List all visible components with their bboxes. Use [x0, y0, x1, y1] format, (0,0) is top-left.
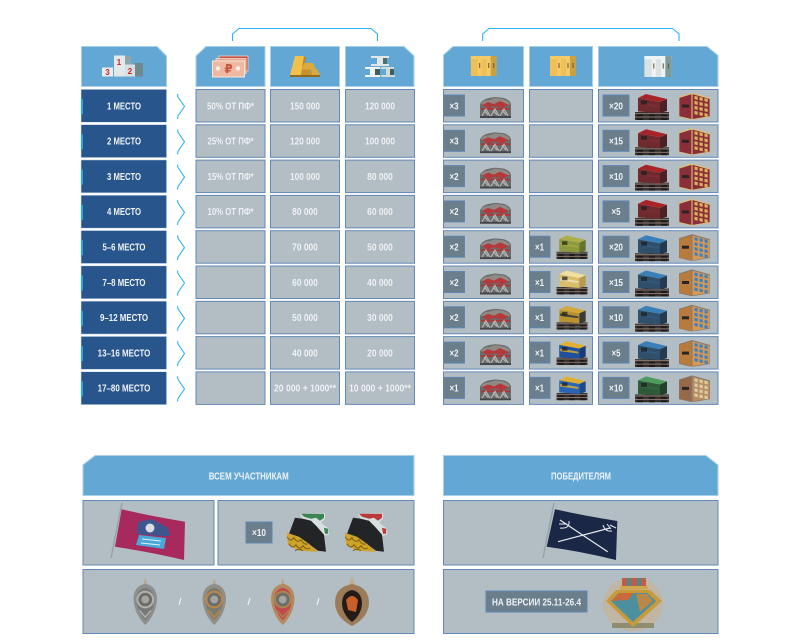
row: 7–8 место: ×2: [450, 278, 459, 289]
row: 2 место: 25% ОТ ПФ*: [208, 137, 254, 148]
row: 17–80 место: 17–80 МЕСТО: [98, 384, 151, 395]
row: 7–8 место: 7–8 МЕСТО: [102, 278, 146, 289]
row: 4 место: ×2: [450, 207, 459, 218]
row: 13–16 место: ×5: [612, 348, 621, 359]
row: 9–12 место: ×2: [450, 313, 459, 324]
row: 5–6 место: 50 000: [367, 242, 393, 253]
row: 3 место: 15% ОТ ПФ*: [208, 172, 254, 183]
row: 1 место: 1 МЕСТО: [107, 101, 141, 112]
row: 7–8 место: [81, 266, 718, 299]
row: 2 место: 2 МЕСТО: [107, 137, 141, 148]
row: 9–12 место: 9–12 МЕСТО: [100, 313, 148, 324]
row: 2 место: [81, 125, 718, 158]
row: 7–8 место: ×15: [609, 278, 623, 289]
icon: gold bars: [290, 56, 320, 77]
row: 4 место: 60 000: [367, 207, 393, 218]
header: gold: [270, 46, 340, 86]
icon: red camouflage: [345, 513, 387, 552]
row: 17–80 место: 20 000 + 1000**: [274, 384, 336, 395]
icon: medal degree 2: [202, 578, 226, 625]
row: 17–80 место: 10 000 + 1000**: [349, 384, 411, 395]
header: steel chest: [598, 46, 718, 86]
icon: version medal: [603, 577, 663, 631]
icon: podium: [102, 56, 143, 77]
icon: crimson flag: [115, 509, 185, 560]
row: 4 место: 10% ОТ ПФ*: [208, 207, 254, 218]
header: second gold chest: [530, 46, 592, 86]
row: 1 место: ×20: [609, 101, 623, 112]
bracket: right group: [483, 28, 679, 41]
icon: medal degree 3: [134, 578, 157, 625]
row: 2 место: ×15: [609, 137, 623, 148]
header: place: [82, 46, 166, 86]
row: 4 место: 4 МЕСТО: [107, 207, 141, 218]
row: 9–12 место: [81, 301, 718, 334]
row: 4 место: ×5: [612, 207, 621, 218]
row: 3 место: 3 МЕСТО: [107, 172, 141, 183]
icon: steel chest: [644, 56, 672, 77]
heading: всем участникам: ВСЕМ УЧАСТНИКАМ: [209, 472, 289, 482]
icon: podium: 2: [128, 67, 133, 76]
row: 2 место: 100 000: [365, 137, 395, 148]
row: 3 место: 80 000: [367, 172, 393, 183]
icon: medal degree 1: [271, 578, 294, 625]
row: 1 место: 150 000: [290, 101, 320, 112]
row: 9–12 место: ×1: [535, 313, 544, 324]
row: 2 место: 120 000: [290, 137, 320, 148]
row: 5–6 место: 5–6 МЕСТО: [102, 242, 146, 253]
row: 1 место: 120 000: [365, 101, 395, 112]
row: 17–80 место: ×1: [535, 384, 544, 395]
row: 13–16 место: ×2: [450, 348, 459, 359]
icon: steel beams: [365, 56, 395, 77]
row: 17–80 место: [81, 372, 718, 405]
row: 9–12 место: 30 000: [367, 313, 393, 324]
row: 5–6 место: ×1: [535, 242, 544, 253]
row: 17–80 место: ×10: [609, 384, 623, 395]
icon: navy flag: [547, 509, 617, 560]
icon: banknotes: ₽: [224, 62, 233, 76]
icon: green camouflage: [287, 513, 329, 552]
icon: gold chest: [550, 56, 576, 76]
navy flag panel: [444, 500, 718, 565]
row: 2 место: ×3: [450, 137, 459, 148]
camouflage panel: [218, 500, 414, 565]
row: 4 место: 80 000: [292, 207, 318, 218]
icon: gold chest: [471, 56, 497, 76]
row: 1 место: [81, 89, 718, 122]
row: 5–6 место: [81, 230, 718, 264]
flag panel: [83, 500, 214, 565]
bracket: left group: [232, 28, 378, 41]
row: 9–12 место: ×10: [609, 313, 623, 324]
icon: ace medal: [335, 577, 369, 626]
header: gold chest: [444, 46, 524, 86]
icon: podium: 1: [117, 58, 122, 67]
heading: победителям: ПОБЕДИТЕЛЯМ: [551, 472, 611, 482]
row: 7–8 место: 60 000: [292, 278, 318, 289]
panel: all participants: [83, 456, 414, 634]
heading: всем участникам: [83, 456, 414, 496]
row: 13–16 место: 20 000: [367, 348, 393, 359]
row: 13–16 место: [81, 336, 718, 369]
version medal panel: НА ВЕРСИИ 25.11-26.4: [492, 597, 581, 608]
row: 3 место: ×2: [450, 172, 459, 183]
row: 5–6 место: ×2: [450, 242, 459, 253]
row: 13–16 место: 40 000: [292, 348, 318, 359]
row: 13–16 место: 13–16 МЕСТО: [98, 348, 151, 359]
row: 1 место: 50% ОТ ПФ*: [207, 101, 254, 112]
row: 3 место: 100 000: [290, 172, 320, 183]
row: 4 место: [81, 195, 718, 228]
heading: победителям: [444, 456, 718, 496]
row: 7–8 место: ×1: [535, 278, 544, 289]
medals panel: [83, 570, 414, 634]
header: money: [196, 46, 265, 86]
row: 7–8 место: 40 000: [367, 278, 393, 289]
panel: winners: [444, 456, 718, 634]
row: 3 место: ×10: [609, 172, 623, 183]
icon: podium: 3: [105, 68, 110, 77]
row: 17–80 место: ×1: [450, 384, 459, 395]
row: 5–6 место: ×20: [609, 242, 623, 253]
camouflage panel: ×10: [252, 528, 266, 539]
row: 1 место: ×3: [450, 101, 459, 112]
header: steel: [346, 46, 414, 86]
row: 5–6 место: 70 000: [292, 242, 318, 253]
row: 9–12 место: 50 000: [292, 313, 318, 324]
version medal panel: [444, 570, 718, 634]
row: 3 место: [81, 160, 718, 193]
row: 13–16 место: ×1: [535, 348, 544, 359]
